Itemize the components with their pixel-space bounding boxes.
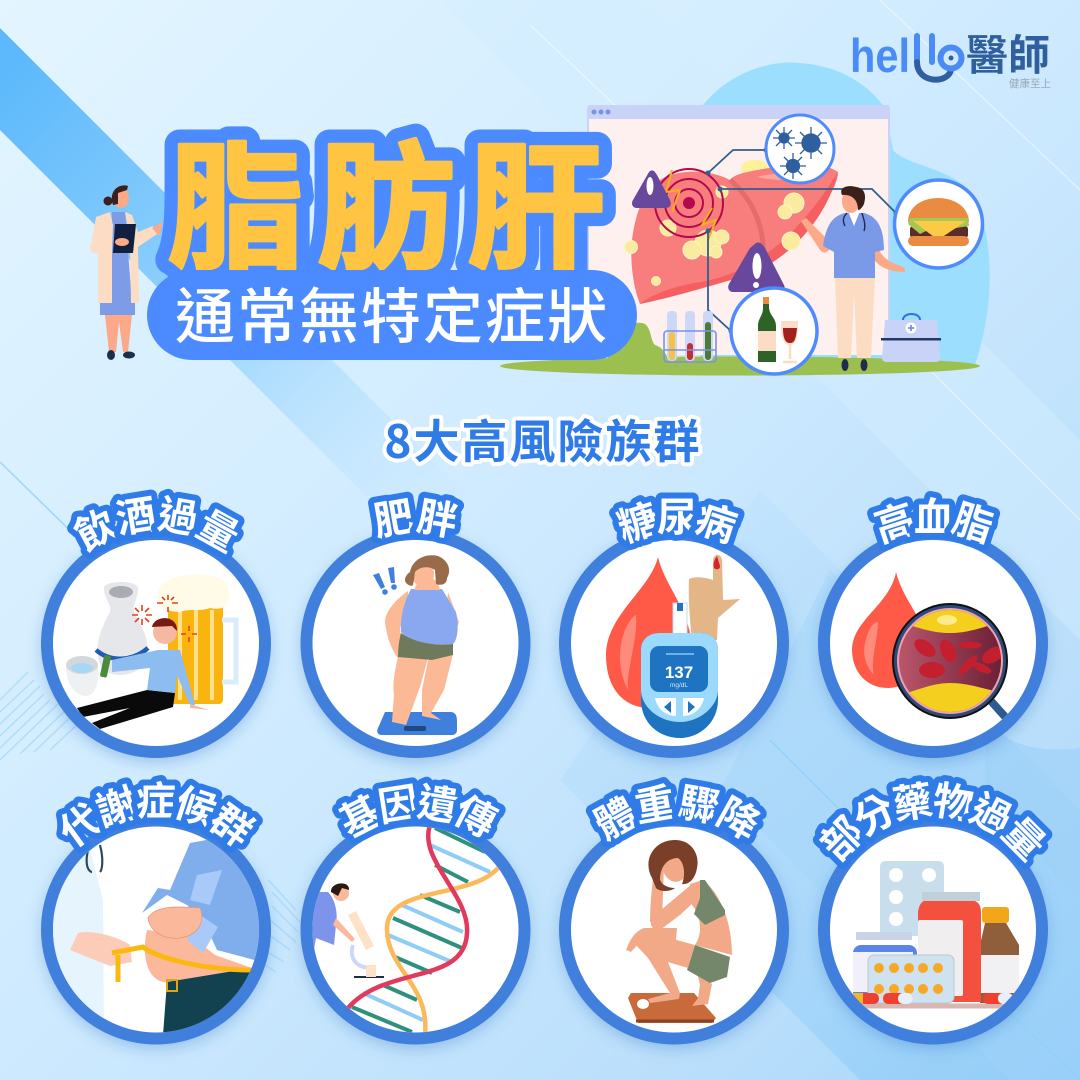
bush [607,323,668,362]
label: 尿 [657,485,697,543]
connectors [708,150,896,331]
icon: medicine bottles [853,861,1019,1006]
label: 高 [866,487,922,554]
label: 體 [583,781,646,851]
small warning [632,170,671,208]
label: 謝 [87,771,143,838]
wine badge [731,288,817,374]
logo: hello 醫師 [850,22,1051,91]
icon: person on scale [373,555,459,735]
label: 群 [200,788,267,858]
panel: 飲酒過量 [41,482,271,758]
fat deposits [624,186,804,286]
lightning [666,170,716,240]
fat deposit top [741,160,769,176]
label: 降 [708,781,771,851]
ground [500,356,980,376]
panel: 高血脂 [818,485,1048,758]
label: 脂 [946,487,1002,554]
decorative hatch [0,672,300,972]
icon: glucose meter [606,555,740,738]
head [664,858,684,882]
burger badge [894,180,982,268]
far leg [692,976,712,1006]
label [583,770,771,851]
label: 分 [842,777,904,847]
icon: sake, beer and man [66,574,236,729]
label [328,770,508,849]
doctor with clipboard [90,185,163,360]
virus badge [766,115,834,183]
title: 脂肪肝 [167,97,617,297]
label: 遺 [414,770,463,833]
panel: 部分藥物過量 [805,768,1061,1044]
blob backdrop [700,63,990,365]
section heading: 8大高風險族群 [384,406,702,472]
label: 糖 [609,487,665,554]
panel: 基因遺傳 [300,770,530,1044]
label: 基 [328,779,390,849]
label: 因 [373,770,422,833]
title: 脂肪肝 [167,97,617,297]
label: 血 [914,485,954,543]
label: 胖 [413,484,463,548]
icon: glucose meter: 137 [665,663,693,682]
icon: thin woman squatting on scale [626,840,732,1023]
near leg [636,940,695,1003]
label [866,485,1002,554]
panel: 體重驟降 [559,770,789,1044]
label: 藥 [888,768,937,831]
big warning [728,242,785,292]
browser window [587,105,890,355]
label [63,482,251,563]
icon: DNA and scientist [312,825,498,1035]
medical kit [881,314,941,362]
label: 肥 [368,484,418,548]
panel: 代謝症候群 [41,769,271,1044]
label: 代 [45,788,112,858]
label: 量 [188,493,251,563]
label: 過 [154,482,203,546]
label: 部 [805,802,875,871]
label: 重 [630,770,679,834]
label [45,769,267,858]
torso [690,880,732,955]
label: 傳 [446,779,508,849]
liver [631,163,838,304]
icon: glucose meter: mg/dL [670,682,688,689]
label [609,485,745,554]
test tubes [664,311,716,362]
label: 候 [169,771,225,838]
label: 驟 [675,770,724,834]
label: 酒 [111,482,160,545]
logo: hello 醫師: 醫師 [966,22,1050,83]
logo: hello 醫師: 健康至上 [1009,76,1051,91]
label: 症 [136,769,176,827]
logo: hello 醫師: hel [850,29,910,82]
arms [650,886,692,928]
icon: waist measurement [50,830,262,1035]
label: 飲 [63,492,126,562]
icon: blood drop and magnifier [852,572,1008,720]
panel: 肥胖 [300,484,530,758]
label [368,484,463,548]
label: 過 [962,777,1024,847]
label: 量 [991,802,1061,871]
label [805,768,1061,871]
panel: 糖尿病 [559,485,789,758]
doctor presenting [801,186,905,371]
subtitle pill: 通常無特定症狀 [175,269,609,356]
target rings [655,169,723,237]
label: 病 [689,487,745,554]
hero illustration: fatty liver scene [90,63,990,376]
label: 物 [929,768,978,831]
